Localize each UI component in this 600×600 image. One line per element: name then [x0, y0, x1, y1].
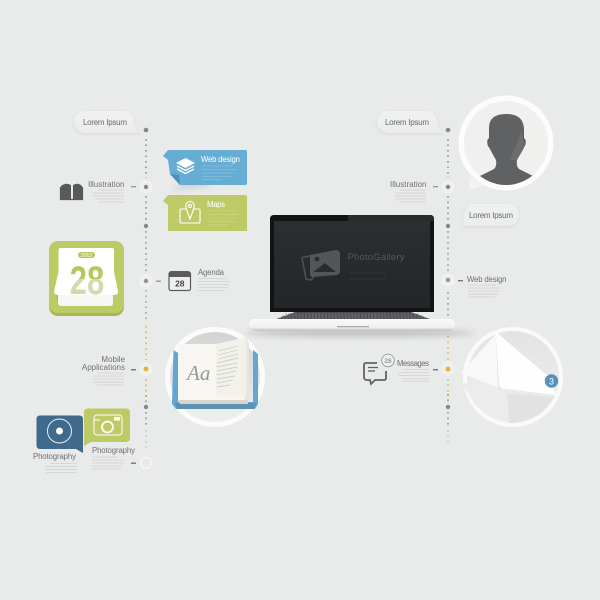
icon: book circle — [165, 327, 265, 427]
callout: right Lorem Ipsum pill — [377, 111, 444, 134]
callout: second right Lorem Ipsum pill: Lorem Ipsum — [469, 211, 513, 220]
icon: camera — [94, 415, 122, 435]
panel: Messages — [364, 354, 429, 384]
callout: left Lorem Ipsum pill: Lorem Ipsum — [83, 118, 127, 127]
callout: left Lorem Ipsum pill — [74, 111, 141, 134]
icon: envelope circle: 3 — [549, 376, 554, 386]
panel: Messages: Messages — [397, 359, 429, 368]
panel: Web design blue card — [163, 150, 247, 190]
panel: Web design right — [467, 275, 506, 297]
panel: Illustration right — [390, 180, 426, 202]
panel: Maps green card — [163, 195, 247, 231]
panel: Photography dark bubble — [33, 416, 83, 472]
panel: Photography green bubble — [84, 408, 135, 469]
panel: Mobile Applications: Mobile — [101, 355, 126, 364]
panel: Maps green card: Maps — [207, 200, 225, 209]
icon: book circle: Aa — [185, 361, 210, 385]
left timeline — [131, 128, 161, 468]
icon: agenda calendar: 28 — [175, 278, 185, 288]
right timeline — [433, 128, 463, 444]
panel: Agenda — [168, 268, 230, 290]
icon: envelope circle — [461, 327, 563, 427]
icon: calendar app tile: 28 — [70, 257, 104, 303]
icon: chat bubble — [364, 363, 386, 384]
panel: Web design right: Web design — [467, 275, 506, 284]
panel: Photography dark bubble: Photography — [33, 452, 76, 461]
panel: Agenda: Agenda — [198, 268, 225, 277]
panel: Photography green bubble: Photography — [92, 446, 135, 455]
icon: calendar app tile — [49, 241, 124, 316]
icon: calendar app tile: 28 — [70, 257, 104, 303]
laptop: PhotoGallery — [348, 252, 405, 263]
icon: count badge: 28 — [384, 358, 392, 365]
panel: Web design blue card: Web design — [201, 155, 240, 164]
icon: layers — [176, 158, 195, 174]
panel: Mobile Applications: Applications — [82, 363, 125, 372]
panel: Illustration left: Illustration — [88, 180, 124, 189]
panel: Illustration left — [60, 180, 124, 202]
icon: map pin — [180, 202, 200, 223]
icon: open book — [60, 184, 82, 200]
icon: photo gallery — [302, 250, 340, 280]
callout: second right Lorem Ipsum pill — [460, 204, 519, 227]
icon: aperture — [48, 419, 72, 443]
panel: Mobile Applications — [82, 355, 126, 385]
panel: Illustration right: Illustration — [390, 180, 426, 189]
icon: calendar app tile: 2013 — [81, 253, 92, 259]
laptop — [245, 215, 475, 337]
icon: avatar circle — [458, 96, 554, 190]
callout: right Lorem Ipsum pill: Lorem Ipsum — [385, 118, 429, 127]
